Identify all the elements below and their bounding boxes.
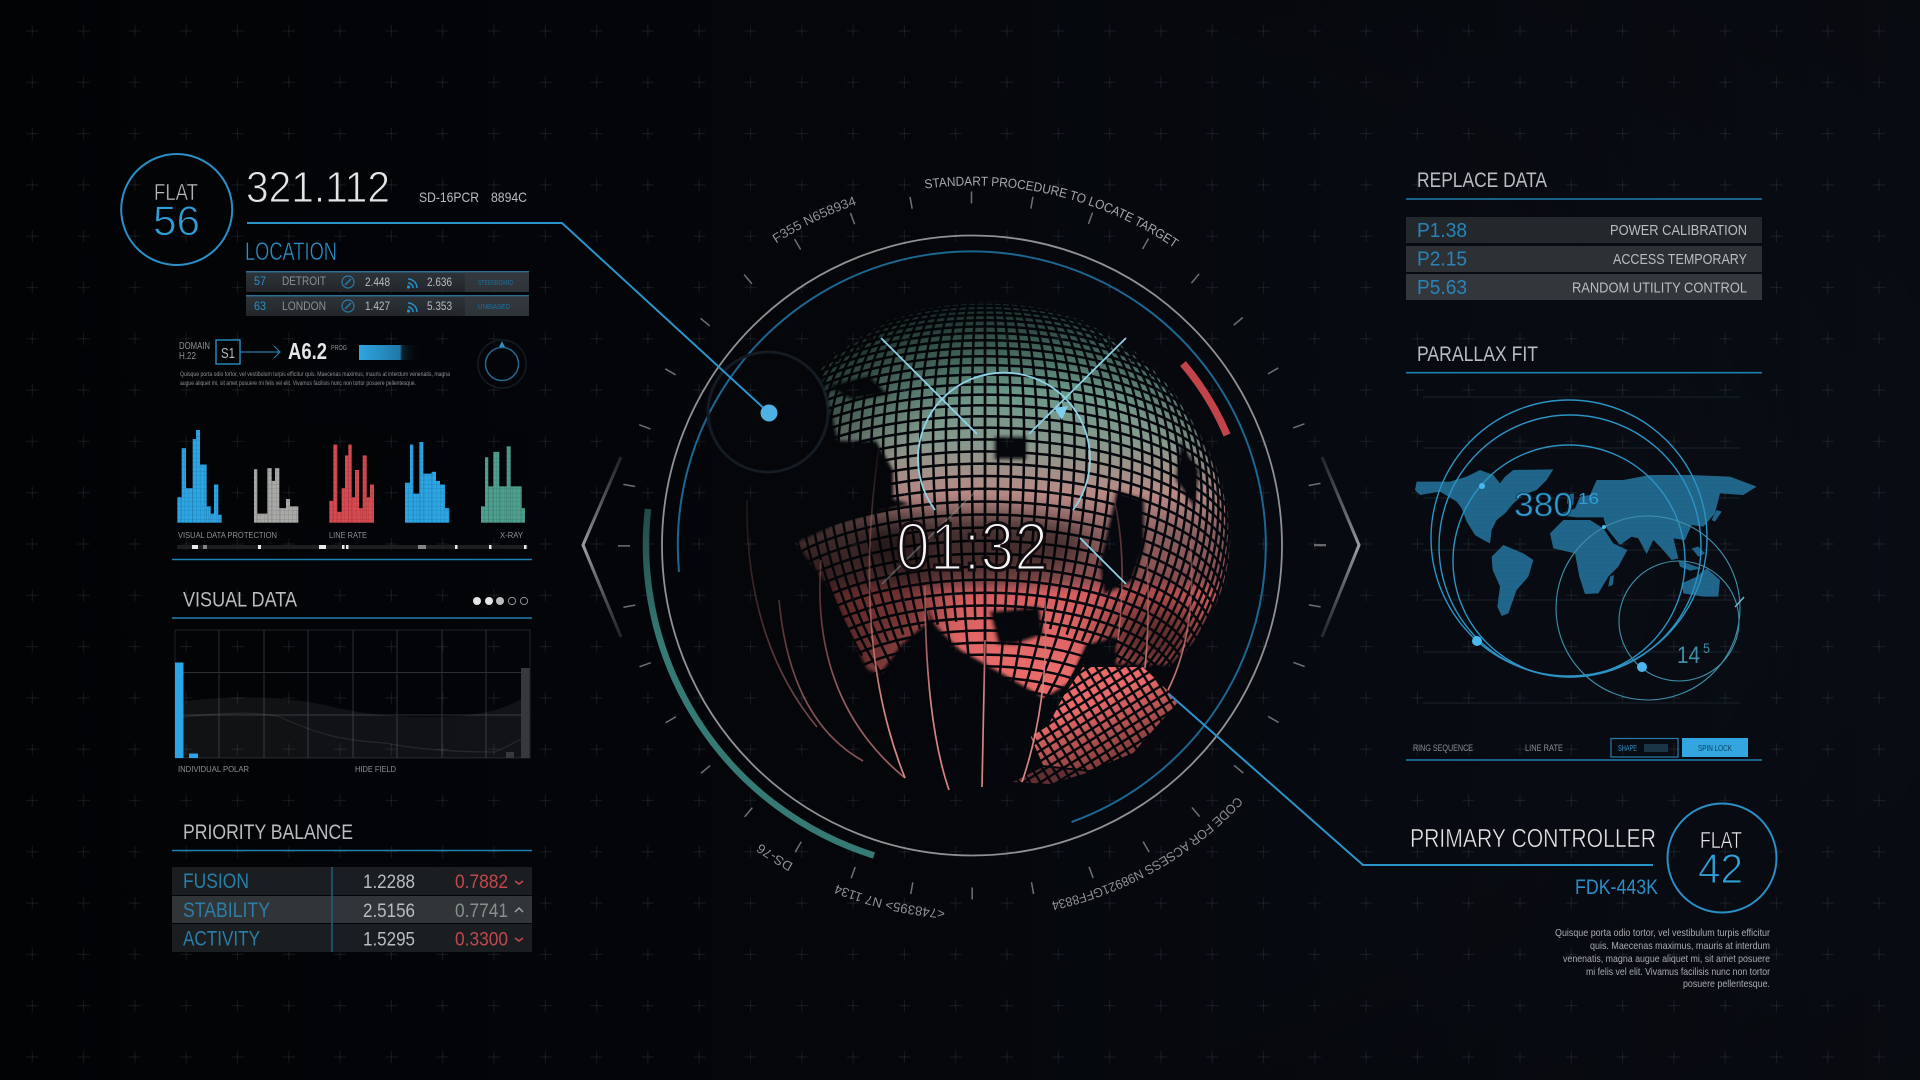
badge: flat 42: FLAT — [1700, 827, 1742, 853]
chart: blue bars 2 — [405, 442, 449, 523]
chart: red bars — [329, 445, 374, 523]
description: posuere pellentesque. — [1683, 978, 1770, 990]
panel: priority balance — [172, 821, 532, 952]
world map — [1415, 469, 1757, 616]
row: fusion: 0.7882 — [455, 872, 508, 893]
code text 2: 8894C — [491, 189, 527, 205]
chart: grey bars — [254, 468, 298, 523]
heading: PARALLAX FIT — [1417, 343, 1538, 366]
dial — [478, 340, 526, 388]
label: individual polar: INDIVIDUAL POLAR — [178, 764, 249, 774]
row: P2.15 — [1406, 246, 1762, 272]
row: London — [246, 295, 529, 316]
panel: visual data — [172, 588, 532, 774]
badge: flat 56: FLAT — [154, 179, 198, 205]
left chevron — [583, 457, 621, 637]
description: quis. Maecenas maximus, mauris at interdum — [1590, 940, 1770, 952]
curved label: DS-76: DS-76 — [757, 844, 793, 871]
panel: replace data — [1406, 169, 1762, 300]
row: fusion: FUSION — [183, 870, 249, 893]
domain readout: PROG — [331, 345, 347, 352]
row: London: 63 — [254, 299, 266, 313]
map: islands — [1567, 493, 1722, 587]
blue ring arc — [678, 251, 1266, 822]
chart label: line rate: LINE RATE — [329, 530, 367, 540]
curved label: 748395: <748395> N7 1134 — [834, 884, 944, 918]
description — [1555, 927, 1770, 990]
row: stability — [172, 896, 532, 923]
row: fusion: 1.2288 — [363, 872, 415, 893]
row: activity: 1.5295 — [363, 930, 415, 950]
panel: location header — [121, 154, 529, 388]
location heading: LOCATION — [245, 238, 337, 266]
headline number: 321.112 — [246, 163, 390, 212]
value: 5: 5 — [1703, 640, 1710, 656]
panel: histogram charts — [172, 428, 532, 560]
domain readout: A6.2 — [288, 338, 327, 364]
globe continents — [796, 301, 1231, 700]
row: Detroit: 57 — [254, 274, 266, 288]
row: Detroit: STEERBOARD — [478, 280, 513, 287]
domain readout: S1 — [221, 345, 235, 362]
row: P2.15: P2.15 — [1417, 248, 1467, 270]
small description: augue aliquet mi, sit amet posuere mi felis vel elit. Vivamus facilisis nunc non tortor posuere pellentesque. — [180, 380, 416, 387]
value: 16: 16 — [1578, 491, 1599, 508]
badge: flat 42: 42 — [1698, 845, 1743, 892]
chart: green bars — [481, 446, 525, 523]
timer: 01:32 — [896, 509, 1048, 585]
connector: location line — [247, 223, 769, 413]
heading: VISUAL DATA — [183, 588, 297, 612]
value: 14: 14 — [1677, 642, 1700, 669]
row: P5.63: RANDOM UTILITY CONTROL — [1572, 280, 1747, 296]
row: London: 5.353 — [427, 299, 452, 313]
target dot — [760, 404, 778, 422]
map: south america — [1492, 545, 1533, 616]
button: spin lock: SPIN LOCK — [1698, 743, 1732, 753]
code text: SD-16PCR — [419, 189, 479, 205]
row: P5.63 — [1406, 274, 1762, 300]
badge: flat 56 — [121, 154, 232, 265]
progress bar — [359, 345, 419, 360]
timer shade — [857, 513, 1087, 577]
value: 380: 380 — [1514, 486, 1573, 523]
description: mi felis vel elit. Vivamus facilisis nunc non tortor — [1586, 966, 1770, 978]
row: activity: ACTIVITY — [183, 928, 260, 950]
area chart — [175, 630, 530, 758]
connector: controller line — [1169, 694, 1653, 865]
label: line rate: LINE RATE — [1525, 743, 1563, 753]
red arc — [1183, 364, 1227, 435]
description: Quisque porta odio tortor, vel vestibulum turpis efficitur — [1555, 927, 1770, 939]
right chevron — [1322, 457, 1359, 637]
row: Detroit: DETROIT — [282, 274, 327, 288]
label: hide field: HIDE FIELD — [355, 764, 396, 774]
chart label: visual data protection: VISUAL DATA PROTECTION — [178, 530, 277, 540]
row: P1.38: POWER CALIBRATION — [1610, 222, 1747, 239]
tick ring — [624, 198, 1320, 894]
small orbit ring — [708, 352, 828, 472]
row: P2.15: ACCESS TEMPORARY — [1613, 251, 1747, 268]
row: P5.63: P5.63 — [1417, 277, 1467, 299]
button: spin lock — [1682, 738, 1748, 757]
curved label: F355: F355 N658934 — [772, 196, 856, 243]
map: africa — [1550, 520, 1627, 594]
heading: PRIMARY CONTROLLER — [1410, 823, 1656, 853]
globe landmass: lower right — [1013, 667, 1177, 784]
row: London: UNBIASED — [478, 304, 510, 311]
guide lines — [1423, 397, 1740, 703]
curved label: standard procedure: STANDART PROCEDURE TO LOCATE TARGET — [925, 176, 1180, 246]
panel: central globe HUD — [247, 176, 1653, 918]
row: activity: 0.3300 — [455, 930, 508, 950]
row: stability: 2.5156 — [363, 901, 415, 922]
row: activity — [172, 924, 532, 952]
small description: Quisque porta odio tortor, vel vestibulum turpis efficitur quis. Maecenas maximus, mauris at interdum venenatis, magna — [180, 371, 450, 378]
crosshair — [881, 338, 1126, 584]
row: London: 1.427 — [365, 299, 390, 313]
button: shape: SHAPE — [1618, 744, 1637, 753]
heading: REPLACE DATA — [1417, 169, 1547, 192]
signal strip — [177, 545, 528, 549]
row: stability: 0.7741 — [455, 901, 508, 922]
row: Detroit — [246, 271, 529, 292]
domain readout: H.22 — [179, 351, 196, 362]
small description — [180, 371, 450, 387]
teal arc — [646, 509, 874, 856]
domain readout: DOMAIN — [179, 341, 210, 352]
code: FDK-443K — [1575, 876, 1658, 899]
chart label: x-ray: X-RAY — [500, 530, 523, 540]
row: fusion — [172, 867, 532, 895]
domain readout — [179, 338, 347, 364]
map: australia — [1682, 568, 1720, 597]
panel: parallax fit — [1406, 343, 1762, 760]
badge: flat 56: 56 — [153, 197, 200, 244]
curved label: access code: CODE FOR ACSESS N98921GFF8834 — [1052, 798, 1242, 910]
button: shape — [1611, 738, 1678, 757]
panel: primary controller — [1410, 804, 1776, 990]
outer ring — [662, 236, 1282, 856]
map: north america — [1415, 469, 1553, 543]
badge: flat 42 — [1668, 804, 1776, 912]
orbit rings — [1431, 400, 1744, 700]
row: stability: STABILITY — [183, 899, 270, 922]
globe meridian lines — [747, 440, 1192, 790]
chart: blue bars 1 — [177, 430, 222, 523]
row: P1.38: P1.38 — [1417, 220, 1467, 242]
bar charts — [177, 428, 527, 523]
row: Detroit: 2.636 — [427, 275, 452, 289]
row: London: LONDON — [282, 299, 326, 313]
row: Detroit: 2.448 — [365, 275, 390, 289]
orbit nodes — [1472, 483, 1647, 672]
heading: PRIORITY BALANCE — [183, 821, 353, 844]
label: ring sequence: RING SEQUENCE — [1413, 743, 1473, 753]
row: P1.38 — [1406, 217, 1762, 243]
map: eurasia — [1557, 475, 1757, 560]
description: venenatis, magna augue aliquet mi, sit amet posuere — [1563, 953, 1770, 965]
page dots — [473, 597, 528, 605]
